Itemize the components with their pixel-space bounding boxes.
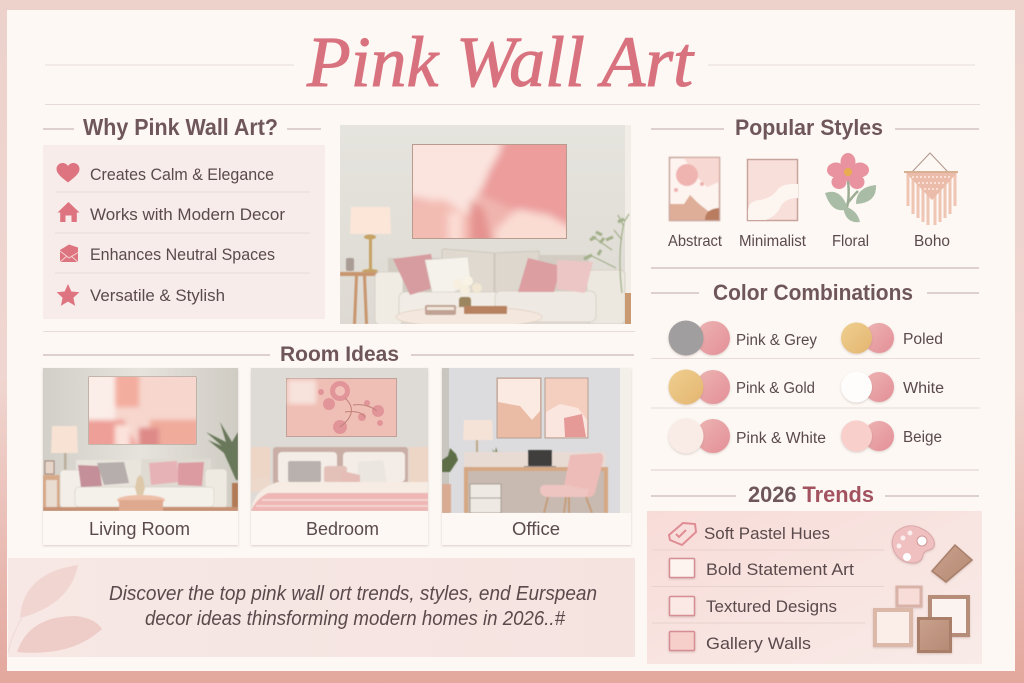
icon: artist palette [892, 526, 934, 563]
banner: closing statement [8, 558, 635, 657]
hero photo: living room with abstract pink art [340, 125, 631, 327]
panel: why pink wall art benefits: Versatile & Stylish [90, 286, 225, 305]
card label: Living Room [89, 518, 190, 539]
side table [340, 258, 378, 324]
banner text: Discover the top pink wall ort trends, styles, end Eurspean [109, 583, 597, 605]
icon: envelope [60, 244, 78, 262]
panel: 2026 trends [647, 511, 982, 664]
swatch: pink and gold [668, 370, 815, 404]
lamp [350, 207, 391, 273]
icon: tilted brown frame [932, 545, 972, 582]
icon: macrame hanging [904, 153, 958, 225]
style: boho [904, 153, 958, 250]
office diptych art [497, 378, 588, 438]
card label: Office [512, 519, 560, 539]
card: bedroom [251, 368, 428, 545]
style: abstract [668, 158, 723, 250]
card label: Bedroom [306, 519, 379, 539]
label: Minimalist [739, 233, 807, 250]
card: office [442, 368, 631, 545]
icon: decorative leaves [8, 565, 102, 653]
swatch: poled: Poled [903, 331, 943, 348]
style: minimalist [739, 160, 807, 250]
label: Floral [832, 233, 869, 250]
icon: star [57, 284, 79, 306]
panel: why pink wall art benefits [43, 145, 325, 319]
panel: 2026 trends: Bold Statement Art [706, 560, 854, 579]
swatch: beige [841, 420, 942, 452]
icon: checkbox [670, 596, 694, 616]
panel: why pink wall art benefits: Enhances Neutral Spaces [90, 245, 275, 264]
heading: Color Combinations: Color Combinations [713, 280, 913, 305]
swatch: white: White [903, 380, 944, 397]
icon: abstract art frame [670, 158, 720, 220]
icon: checkbox [670, 558, 694, 578]
panel: 2026 trends: Soft Pastel Hues [704, 524, 830, 543]
swatch: beige: Beige [903, 429, 942, 446]
coffee table, books and flowers [396, 276, 542, 327]
panel: why pink wall art benefits: Works with Modern Decor [90, 205, 285, 224]
swatch: pink and gold: Pink & Gold [736, 380, 815, 397]
icon: flower [825, 153, 876, 222]
label: Abstract [668, 233, 723, 250]
colour swatches [651, 320, 980, 454]
panel: 2026 trends: Gallery Walls [706, 634, 811, 653]
swatch: pink and grey [668, 320, 817, 356]
title: Pink Wall Art [306, 22, 695, 102]
heading: Popular Styles: Popular Styles [735, 115, 883, 140]
icon: gallery frames [875, 587, 968, 652]
panel: 2026 trends: Textured Designs [706, 597, 837, 616]
banner: closing statement: decor ideas thinsforming modern homes in 2026..# [145, 608, 566, 630]
icon: heart [56, 163, 80, 182]
icon: minimalist art frame [748, 160, 798, 220]
benefit labels: Creates Calm & Elegance [90, 165, 274, 184]
swatch: white [841, 372, 944, 402]
icon: checkbox [670, 632, 694, 650]
swatch: pink and grey: Pink & Grey [736, 332, 817, 349]
icon: house [58, 202, 80, 222]
icon: tag [669, 523, 696, 545]
swatch: pink and white: Pink & White [736, 430, 826, 447]
swatch: poled [841, 322, 943, 354]
card: living room [43, 368, 238, 545]
swatch: pink and white [668, 418, 826, 454]
style: floral [825, 153, 876, 250]
heading: Room Ideas: Room Ideas [280, 343, 399, 366]
heading: 2026 Trends: 2026 Trends [748, 482, 874, 507]
abstract pink canvas [412, 144, 567, 239]
sofa with pillows [375, 249, 625, 325]
label: Boho [914, 233, 950, 250]
heading: Why Pink Wall Art?: Why Pink Wall Art? [83, 114, 278, 140]
plant [584, 214, 629, 293]
floral canvas [286, 378, 396, 436]
